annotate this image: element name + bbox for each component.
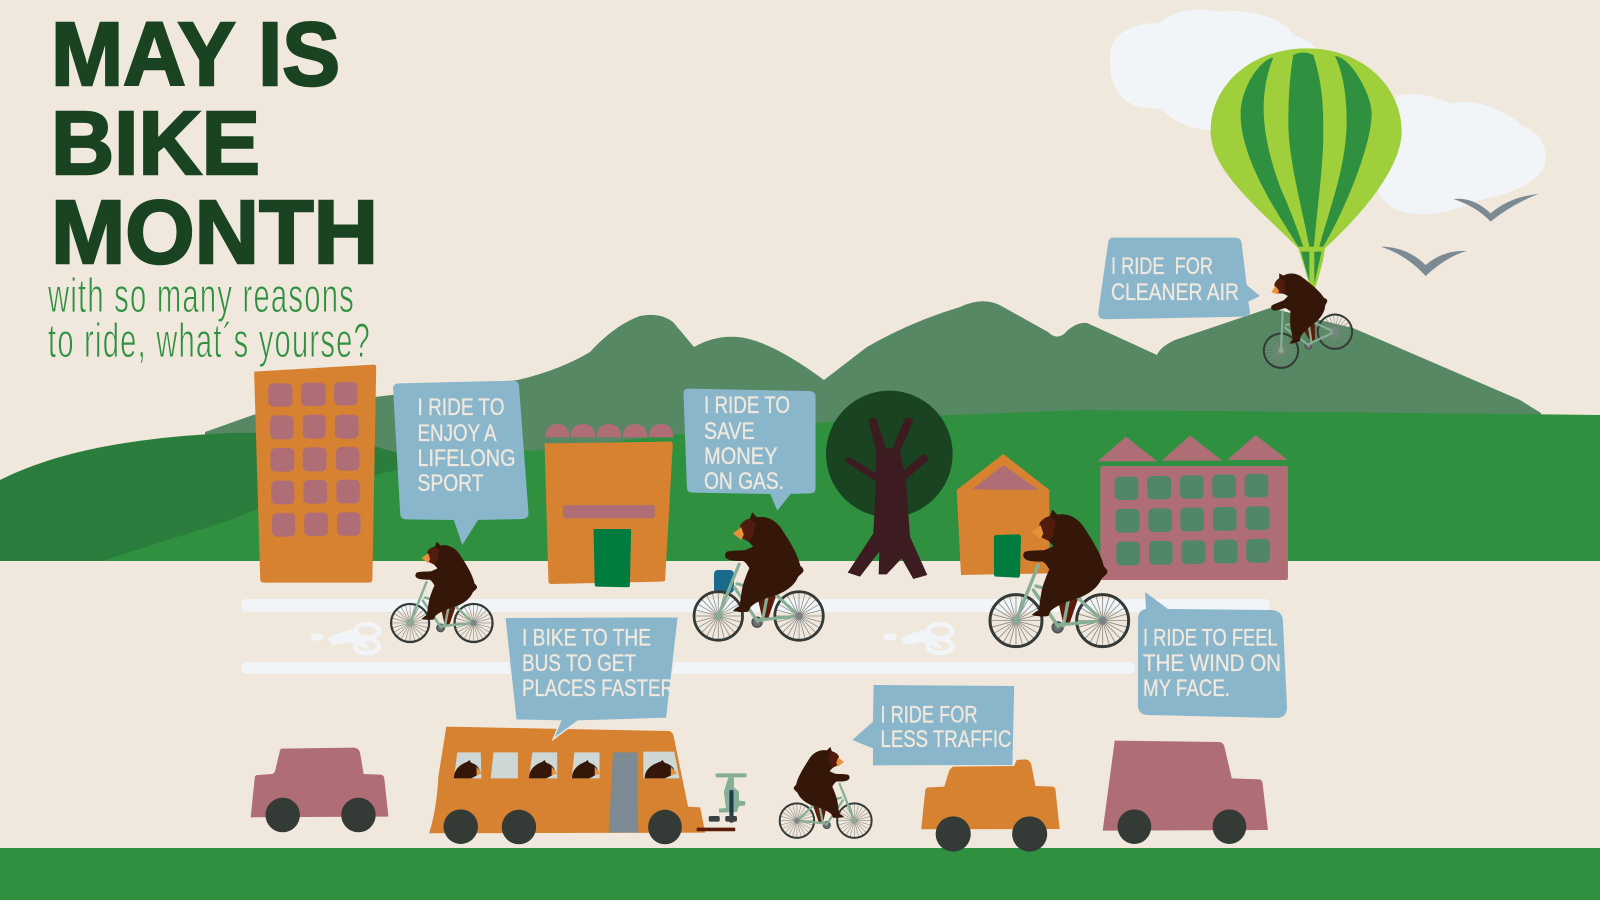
orange tower building bbox=[254, 365, 376, 583]
callout: less traffic: LESS TRAFFIC bbox=[880, 726, 1012, 753]
tree bbox=[826, 391, 953, 579]
basket bbox=[714, 570, 734, 593]
callout: bus bbox=[505, 617, 678, 739]
pink car bbox=[251, 748, 388, 832]
callout: cleaner air bbox=[1098, 238, 1260, 319]
title line 3: MONTH bbox=[51, 183, 378, 283]
callout: wind on face: MY FACE. bbox=[1143, 675, 1230, 702]
cloud right bbox=[1378, 94, 1546, 214]
title bbox=[51, 5, 378, 283]
subtitle bbox=[47, 270, 371, 368]
bike on bus rack bbox=[697, 773, 747, 831]
green hill bbox=[102, 410, 1600, 561]
callout: bus: BUS TO GET bbox=[522, 650, 636, 677]
lane marking right bbox=[887, 624, 952, 653]
callout: lifelong sport bbox=[393, 381, 529, 545]
hot air balloon bbox=[1211, 48, 1402, 288]
callout: lifelong sport: ENJOY A bbox=[418, 420, 497, 447]
birds bbox=[1381, 194, 1539, 276]
bike lane lower line bbox=[241, 662, 1135, 674]
lane marking left bbox=[314, 624, 379, 653]
bear cyclist 1 bbox=[391, 541, 493, 642]
subtitle line 1: with so many reasons bbox=[47, 270, 355, 323]
callout: bus: PLACES FASTER bbox=[522, 675, 674, 702]
bear cyclist on mountain bbox=[1240, 257, 1357, 373]
callout: less traffic bbox=[852, 685, 1014, 765]
bike lane upper line bbox=[241, 599, 1270, 612]
callout: save money: ON GAS. bbox=[704, 468, 784, 495]
callout: wind on face: THE WIND ON bbox=[1143, 650, 1281, 677]
mountains bbox=[205, 301, 1541, 460]
callout: wind on face: I RIDE TO FEEL bbox=[1143, 625, 1278, 652]
bus bbox=[429, 727, 705, 844]
callout: save money bbox=[683, 389, 816, 511]
callout: less traffic: I RIDE FOR bbox=[880, 702, 978, 729]
callout: cleaner air: I RIDE FOR bbox=[1111, 253, 1213, 280]
callout: lifelong sport: I RIDE TO bbox=[418, 394, 504, 421]
callout: save money: MONEY bbox=[704, 443, 778, 470]
title line 1: MAY IS bbox=[51, 5, 340, 105]
subtitle line 2: to ride, what´s yourse? bbox=[48, 315, 371, 368]
bear cyclist 4 bbox=[780, 747, 872, 838]
dark green hill bbox=[0, 433, 420, 561]
callout: bus: I BIKE TO THE bbox=[522, 625, 651, 652]
ground strip bbox=[0, 848, 1600, 900]
orange house bbox=[957, 454, 1049, 578]
callout: lifelong sport: LIFELONG bbox=[418, 445, 516, 472]
orange car bbox=[921, 759, 1060, 852]
callout: cleaner air: CLEANER AIR bbox=[1111, 279, 1239, 306]
road surface bbox=[0, 561, 1600, 848]
pink truck bbox=[1103, 741, 1268, 844]
bear cyclist 3 bbox=[990, 509, 1129, 647]
callout: lifelong sport: SPORT bbox=[418, 470, 484, 497]
title line 2: BIKE bbox=[51, 94, 260, 194]
callout: save money: SAVE bbox=[704, 418, 754, 445]
orange shop bbox=[545, 424, 673, 587]
cloud left bbox=[1110, 9, 1317, 130]
callout: wind on face bbox=[1138, 592, 1287, 718]
callout: save money: I RIDE TO bbox=[704, 392, 790, 419]
mauve factory bbox=[1098, 435, 1288, 580]
bear cyclist 2 bbox=[694, 512, 823, 640]
